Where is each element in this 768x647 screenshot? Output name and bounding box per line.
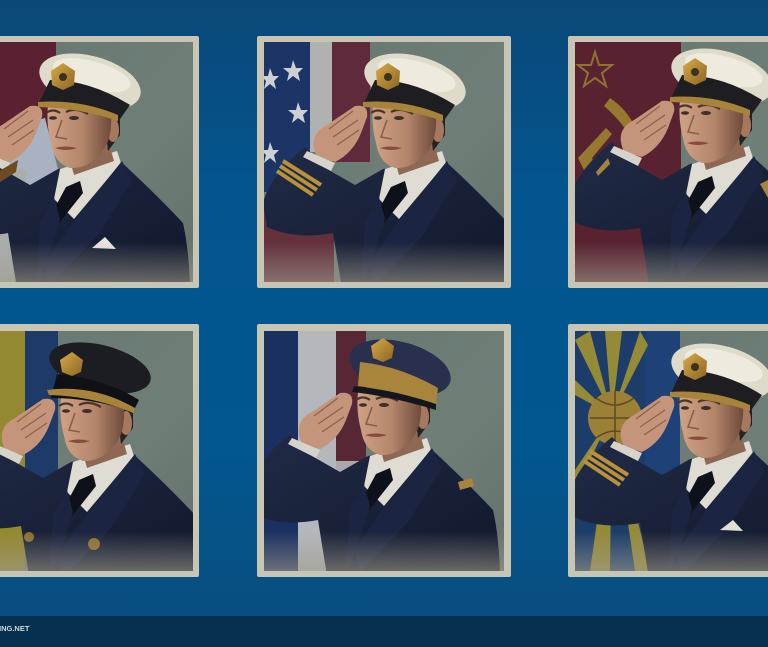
icon: dark peaked cap — [47, 342, 151, 413]
flag: red with star and hammer — [575, 42, 681, 282]
flag: navy white red — [264, 331, 366, 571]
panel: officer card top centre — [257, 36, 515, 295]
flag: maroon and pale blue — [0, 42, 62, 282]
footer bar — [0, 616, 768, 647]
panel: officer card top left — [0, 36, 199, 295]
panel: officer card bottom right — [568, 324, 768, 585]
flag: globe with gold rays on blue — [575, 331, 680, 571]
flag: stars and stripes — [261, 42, 370, 282]
flag: yellow and blue — [0, 331, 58, 571]
panel: officer card top right — [568, 36, 768, 290]
panel: officer card bottom left — [0, 324, 203, 588]
icon: navy cap with gold band — [349, 338, 451, 410]
panel: officer card bottom centre — [248, 324, 511, 582]
